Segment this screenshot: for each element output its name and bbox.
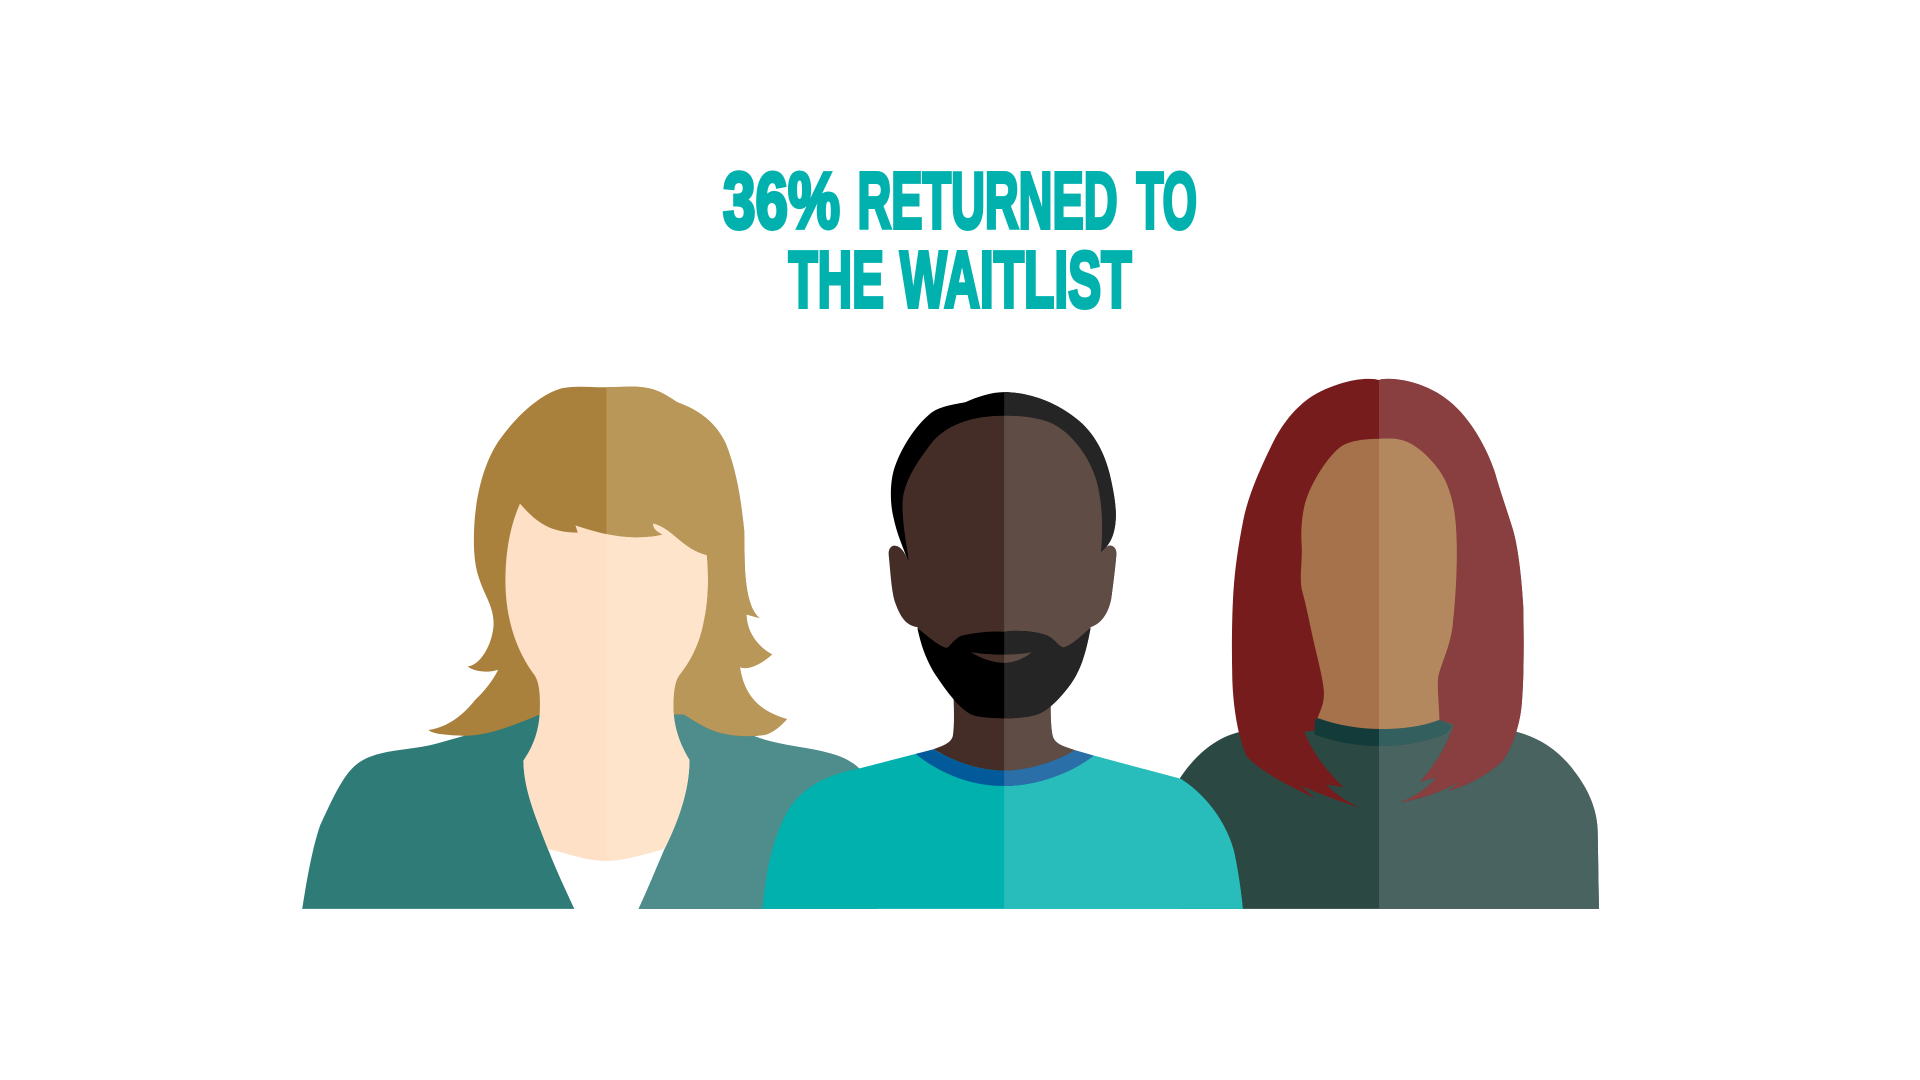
person: woman with red hair and dark green top [1180, 379, 1599, 909]
neck [934, 699, 1075, 771]
hair [891, 392, 1116, 563]
torso [1180, 705, 1599, 909]
hair [428, 387, 787, 736]
title line 2 [788, 235, 1132, 324]
person: man with beard and teal shirt [762, 392, 1243, 909]
title line 1 [723, 156, 1197, 245]
hair [1232, 379, 1524, 808]
title [723, 156, 1197, 324]
title line 1: 36% [723, 156, 840, 245]
person: woman with blonde hair and teal jacket [302, 387, 877, 909]
face [889, 416, 1116, 652]
face and neck [505, 504, 708, 861]
beard [917, 628, 1091, 718]
collar [1314, 719, 1452, 746]
face and neck [1301, 438, 1457, 729]
collar [916, 749, 1094, 786]
shirt [762, 754, 1243, 909]
mouth [971, 652, 1032, 663]
title line 1: RETURNED [858, 156, 1118, 245]
title line 1: TO [1136, 156, 1197, 245]
jacket [302, 705, 877, 909]
title line 2: WAITLIST [900, 235, 1132, 324]
title line 2: THE [788, 235, 884, 324]
